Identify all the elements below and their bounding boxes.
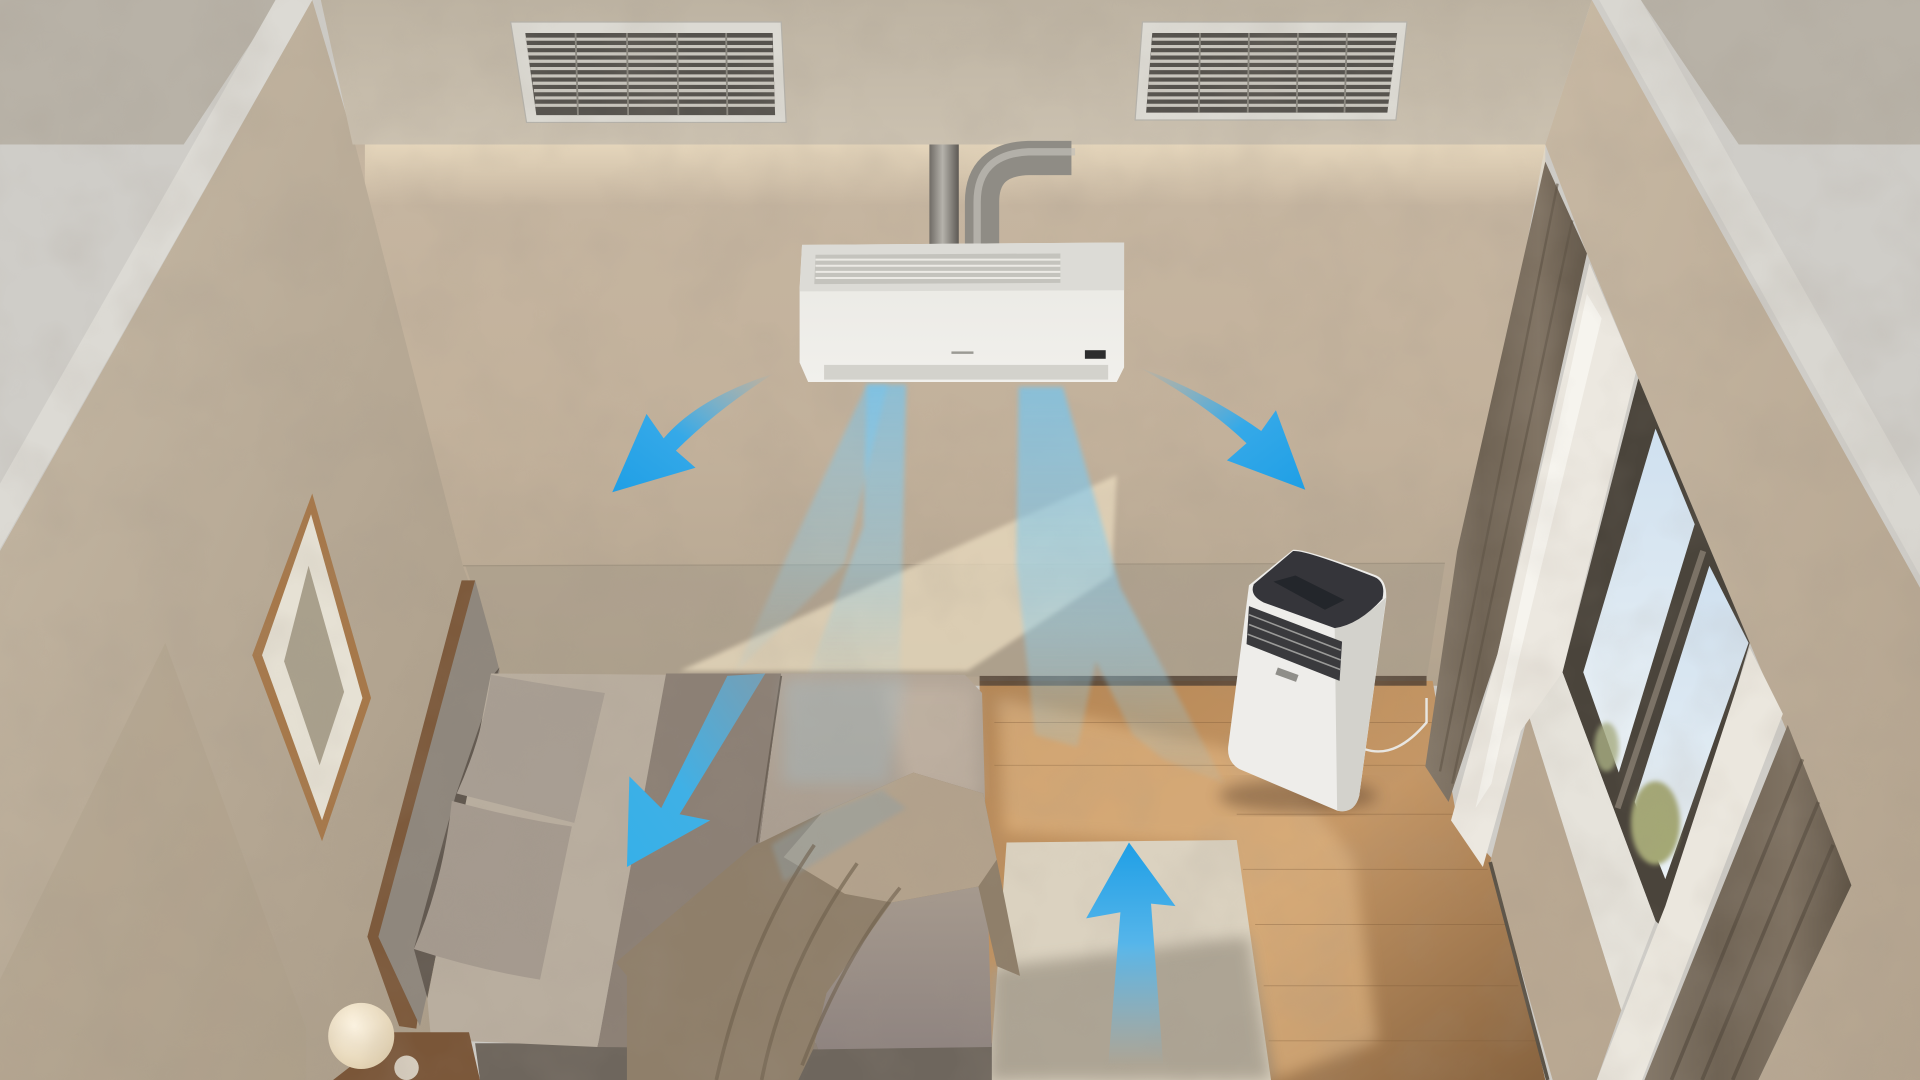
arrow: over bed bbox=[627, 673, 765, 867]
sheer curtain: left bbox=[1451, 263, 1636, 867]
arrow: upper left bbox=[612, 373, 774, 492]
vent: left bbox=[511, 22, 786, 122]
top beam wall with vents bbox=[321, 0, 1592, 144]
arrow: upper right bbox=[1139, 367, 1305, 490]
left wall bbox=[0, 0, 502, 1080]
sunlight patch bbox=[680, 475, 1117, 671]
right wall top edge bbox=[1599, 0, 1920, 576]
wall AC unit bbox=[800, 144, 1124, 382]
wall art frame bbox=[252, 493, 371, 841]
left wall top edge bbox=[0, 0, 312, 549]
right wall with window bbox=[1490, 0, 1920, 1080]
window frame and panes bbox=[1562, 378, 1750, 931]
arrow: up from rug bbox=[1086, 842, 1176, 1065]
blanket bbox=[616, 773, 1020, 1080]
unit body bbox=[800, 242, 1124, 382]
back wall bbox=[343, 144, 1545, 686]
sheer curtain: right bbox=[1597, 648, 1783, 1080]
rug bbox=[989, 840, 1271, 1080]
lower wall below window bbox=[1490, 714, 1621, 1080]
duvet: left band bbox=[598, 673, 818, 1049]
pillow: lower bbox=[414, 801, 572, 980]
airflow streams from AC bbox=[735, 384, 1224, 784]
bed base bbox=[475, 1043, 992, 1080]
duvet: right band bbox=[758, 673, 992, 1049]
sheet bbox=[427, 673, 666, 1047]
right curtain panel bbox=[1597, 648, 1851, 1080]
nightstand and lamp bbox=[328, 1003, 480, 1080]
left curtain panel bbox=[1425, 162, 1636, 867]
ducts bbox=[929, 144, 1075, 250]
bed bbox=[367, 580, 1020, 1080]
headboard bbox=[367, 580, 475, 1029]
vent: right bbox=[1135, 22, 1407, 120]
floor bbox=[980, 676, 1545, 1080]
portable air conditioner bbox=[1218, 550, 1427, 813]
window sill bbox=[1528, 672, 1656, 1010]
pillow: upper bbox=[457, 675, 605, 823]
